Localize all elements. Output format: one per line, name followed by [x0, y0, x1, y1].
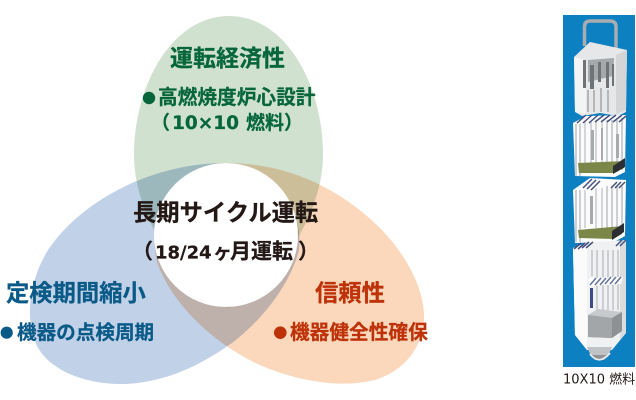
petal: operating economy — [134, 16, 323, 308]
centre subheading: （ — [132, 240, 153, 264]
petal: reliability — [155, 163, 424, 384]
heading: shorter inspection period: 定検期間縮小 — [6, 280, 146, 306]
venn diagram — [30, 16, 424, 384]
second rod section — [573, 178, 626, 243]
bullet — [143, 92, 155, 104]
bullet label: 機器の点検周期 — [17, 322, 154, 344]
blue background panel — [563, 15, 635, 367]
bottom nozzle — [587, 347, 612, 360]
bullet text: high burnup core design — [143, 86, 316, 134]
heading: reliability: 信頼性 — [315, 280, 385, 306]
centre subheading: 月運転 — [230, 240, 293, 264]
bullet label: 高燃焼度炉心設計 — [158, 86, 316, 109]
upper tie plate section — [574, 42, 627, 116]
bullet text: equipment integrity — [274, 322, 428, 344]
fuel note: （ — [151, 112, 170, 134]
centre subheading: ） — [298, 240, 319, 264]
bullet label: 機器健全性確保 — [290, 322, 428, 344]
lower channel section — [573, 240, 626, 350]
centre heading: 長期サイクル運転 — [133, 200, 318, 226]
bullet — [1, 327, 13, 339]
centre subheading: ヶ — [213, 242, 232, 264]
bullet text: inspection period — [1, 322, 154, 344]
centre circle — [154, 163, 298, 307]
fuel note: 10×10 — [172, 113, 239, 134]
fuel note: ） — [284, 112, 303, 134]
petal: shorter inspection period — [30, 163, 299, 384]
bullet — [274, 326, 287, 339]
heading: operating economy: 運転経済性 — [170, 45, 285, 71]
fuel assembly illustration — [563, 15, 635, 367]
centre subheading: 18/24 — [155, 242, 212, 264]
fuel note: 燃料 — [246, 112, 284, 134]
handle — [584, 21, 616, 48]
first rod section with spacer — [573, 115, 626, 177]
caption: fuel: 10X10 燃料 — [563, 372, 635, 388]
